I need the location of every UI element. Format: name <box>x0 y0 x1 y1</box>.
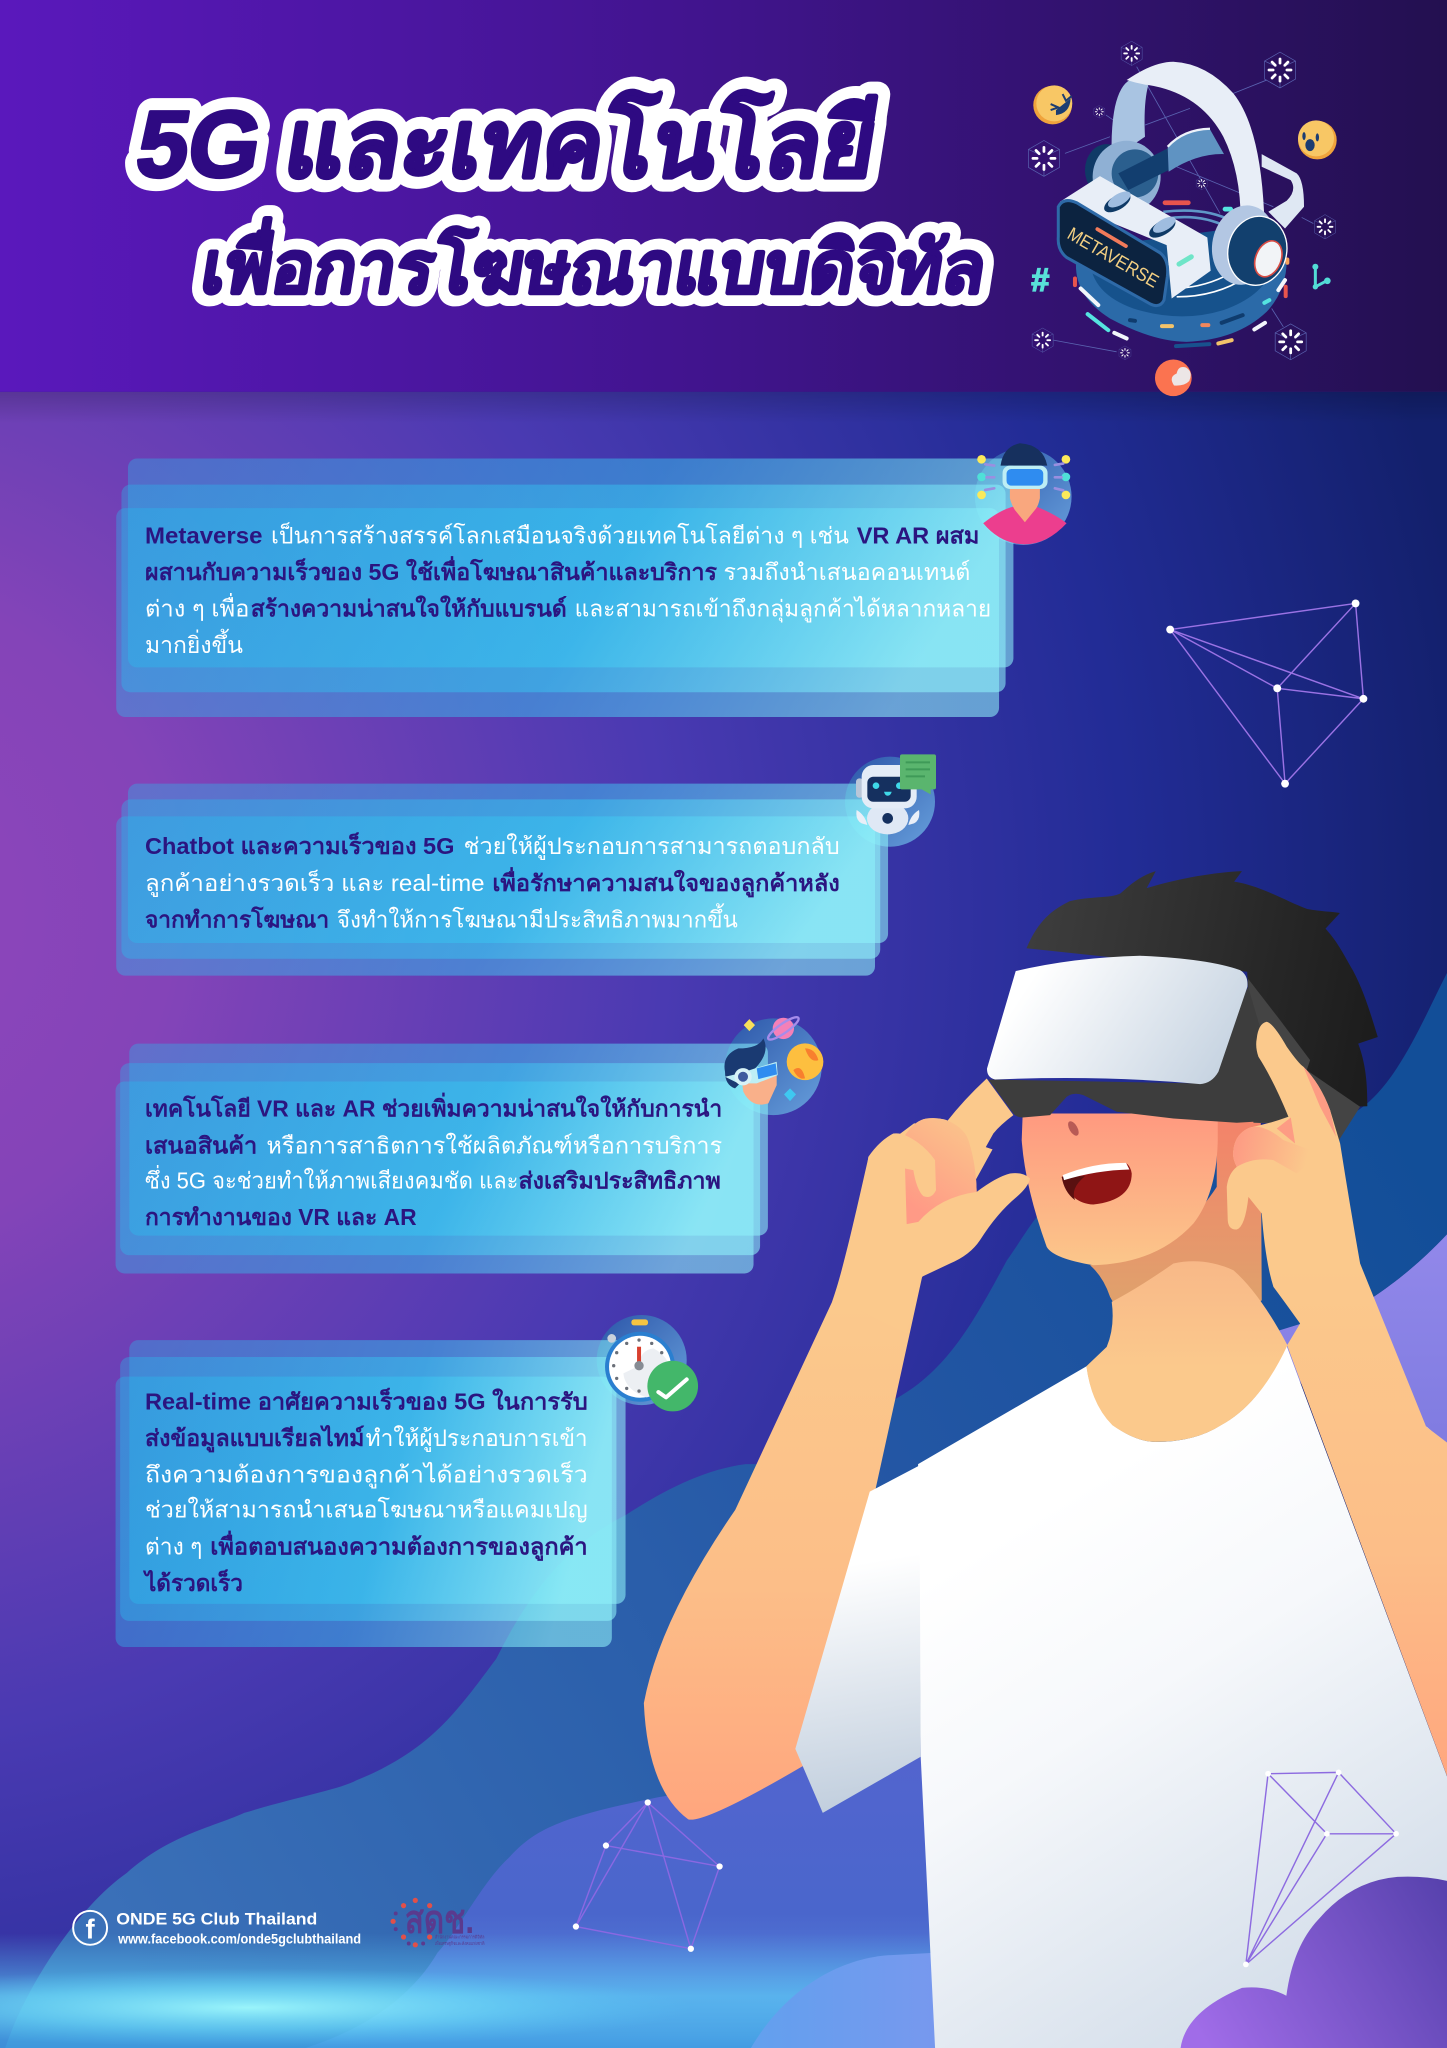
emoji: laughing <box>1033 85 1072 124</box>
text block: ส่งเสริมประสิทธิภาพ <box>518 1168 721 1194</box>
neck shadow <box>1090 1120 1262 1320</box>
logo ring dots <box>390 1898 432 1947</box>
goggles <box>1058 176 1211 306</box>
headset label: METAVERSE <box>1064 223 1163 292</box>
panel: Metaverse <box>116 443 1072 717</box>
text block: สร้างความน่าสนใจให้กับแบรนด์ <box>251 594 567 621</box>
page URL: www.facebook.com/onde5gclubthailand <box>117 1932 361 1947</box>
right shirt edge <box>1426 1426 1447 1469</box>
head strap <box>1085 62 1304 228</box>
text block: ต่าง ๆ เพื่อ <box>145 592 249 621</box>
icon: share nodes <box>1312 264 1331 289</box>
headset front plate <box>987 956 1248 1084</box>
shirt sleeve <box>795 1465 921 1813</box>
mouth <box>1062 1163 1132 1205</box>
text block: ซึ่ง 5G จะช่วยทำให้ภาพเสียงคมชัด และ <box>145 1165 518 1194</box>
text block: ถึงความต้องการของลูกค้าได้อย่างรวดเร็ว <box>145 1459 588 1488</box>
title: 5G และเทคโนโลยี <box>130 90 885 197</box>
network: lower left <box>573 1799 723 1952</box>
text block: ได้รวดเร็ว <box>142 1568 243 1596</box>
text block: หรือการสาธิตการใช้ผลิตภัณฑ์หรือการบริการ <box>266 1132 722 1158</box>
panel: Chatbot <box>116 754 936 976</box>
text block: และสามารถเข้าถึงกลุ่มลูกค้าได้หลากหลาย <box>575 595 991 622</box>
face <box>1022 1113 1218 1265</box>
text block <box>145 520 991 658</box>
panel: VR and AR <box>116 1014 823 1273</box>
header shadow <box>0 392 1447 423</box>
text block: VR AR ผสม <box>857 522 979 548</box>
text block: ช่วยให้สามารถนำเสนอโฆษณาหรือแคมเปญ <box>145 1497 588 1523</box>
hair <box>1026 871 1378 1110</box>
head, hands and headset <box>840 956 1447 1784</box>
icon: space person <box>724 1014 823 1105</box>
title: เพื่อการโฆษณาแบบดิจิทัล <box>196 217 994 308</box>
header band <box>0 0 1447 392</box>
panel: Real-time <box>116 1315 698 1647</box>
text block <box>145 831 840 932</box>
text block: Chatbot และความเร็วของ 5G <box>145 831 454 859</box>
text block: ส่งข้อมูลแบบเรียลไทม์ <box>145 1424 364 1453</box>
text block: เสนอสินค้า <box>145 1132 257 1158</box>
page name: ONDE 5G Club Thailand <box>116 1911 317 1929</box>
icon: VR person <box>977 443 1070 544</box>
text block: เป็นการสร้างสรรค์โลกเสมือนจริงด้วยเทคโนโลยีต่าง ๆ เช่น <box>271 520 849 548</box>
text block: เทคโนโลยี VR และ AR ช่วยเพิ่มความน่าสนใจให้กับการนำ <box>145 1093 722 1122</box>
logo agency name: สำนักงานคณะกรรมการดิจิทัล <box>435 1933 485 1939</box>
t-shirt <box>918 1345 1447 2048</box>
emoji: heart <box>1155 359 1192 396</box>
text block: การทำงานของ VR และ AR <box>145 1204 417 1230</box>
icon backdrop: VR person circle <box>975 448 1072 545</box>
headset visor <box>988 987 1288 1123</box>
text block: ช่วยให้ผู้ประกอบการสามารถตอบกลับ <box>464 833 840 860</box>
network on shirt <box>1243 1770 1399 1967</box>
icon: facebook: f <box>86 1913 96 1944</box>
text block: Metaverse <box>145 522 262 548</box>
text block: ทำให้ผู้ประกอบการเข้า <box>366 1425 588 1452</box>
text block: เพื่อตอบสนองความต้องการของลูกค้า <box>210 1530 588 1561</box>
text block <box>145 1093 722 1230</box>
text block: รวมถึงนำเสนอคอนเทนต์ <box>724 559 970 585</box>
logo wordmark: สดช. <box>405 1899 474 1942</box>
neck <box>1086 1261 1287 1442</box>
icon: hash: # <box>1031 261 1049 298</box>
nose <box>1066 1120 1081 1137</box>
title <box>130 90 994 308</box>
card layers <box>116 1340 626 1647</box>
network: upper right <box>1166 600 1367 788</box>
text block: จึงทำให้การโฆษณามีประสิทธิภาพมากขึ้น <box>337 903 738 932</box>
card layers <box>116 1044 768 1273</box>
text block: ผสานกับความเร็วของ 5G ใช้เพื่อโฆษณาสินค้าและบริการ <box>145 556 718 585</box>
text block <box>142 1386 588 1596</box>
logo agency name: เพื่อเศรษฐกิจและสังคมแห่งชาติ <box>435 1940 485 1947</box>
icon: facebook <box>73 1911 107 1945</box>
footer: agency logo <box>390 1898 485 1947</box>
left index finger <box>947 1078 1013 1163</box>
text block: จากทำการโฆษณา <box>145 905 329 932</box>
logo agency name <box>435 1933 485 1947</box>
card layers <box>116 458 1013 717</box>
icon backdrop: robot circle <box>845 757 935 847</box>
right hand and forearm <box>1227 1022 1447 1784</box>
footer: Facebook contact <box>73 1911 361 1947</box>
icon: metaverse headset <box>1028 41 1337 396</box>
icon backdrop: space person circle <box>725 1018 822 1115</box>
left hand <box>840 1118 1030 1334</box>
title: 5G และเทคโนโลยี <box>130 90 885 197</box>
text block: เพื่อรักษาความสนใจของลูกค้าหลัง <box>492 867 840 898</box>
illustration: man wearing VR headset <box>644 871 1447 2048</box>
left arm <box>644 1123 993 1820</box>
headset strap <box>1248 979 1360 1143</box>
title: เพื่อการโฆษณาแบบดิจิทัล <box>196 217 994 308</box>
icon: stopwatch <box>605 1319 698 1411</box>
icon: robot <box>856 754 936 834</box>
ear cup <box>1205 199 1293 291</box>
text block: มากยิ่งขึ้น <box>145 629 243 658</box>
platform base <box>1075 203 1287 346</box>
card layers <box>116 784 888 976</box>
background: wave shapes <box>0 973 1447 2048</box>
foreground purple wave <box>1181 1877 1447 2048</box>
emoji: surprised <box>1298 120 1337 159</box>
icon backdrop: stopwatch circle <box>597 1315 687 1405</box>
text block: Real-time อาศัยความเร็วของ 5G ในการรับ <box>145 1386 588 1414</box>
text block: ต่าง ๆ <box>145 1533 202 1559</box>
text block: ลูกค้าอย่างรวดเร็ว และ real-time <box>145 868 485 897</box>
